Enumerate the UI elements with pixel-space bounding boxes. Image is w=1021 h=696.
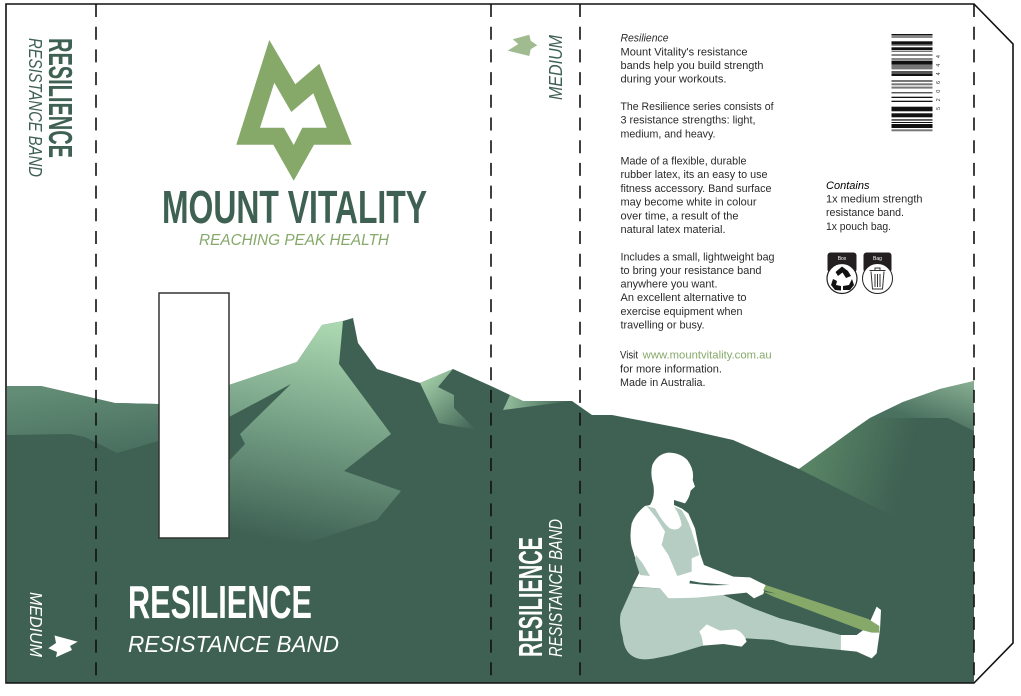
product description text: Made in Australia. <box>620 377 706 389</box>
left flap strength label <box>26 592 78 657</box>
medium text: MEDIUM <box>546 35 566 100</box>
product description text: www.mountvitality.com.au <box>642 350 772 362</box>
product description text: may become white in colour <box>620 196 757 208</box>
product description text: over time, a result of the <box>620 210 738 222</box>
logo: brand name: MOUNT VITALITY <box>162 181 427 233</box>
contents list: 1x medium strength <box>826 194 922 206</box>
product description text: exercise equipment when <box>620 306 742 318</box>
subtitle: resistance band: RESISTANCE BAND <box>128 631 339 657</box>
spine product name <box>513 519 566 657</box>
barcode bars <box>892 34 932 131</box>
product description text: rubber latex, its an easy to use <box>620 169 768 181</box>
left flap title: RESILIENCE <box>41 38 78 158</box>
product description text: fitness accessory. Band surface <box>620 183 772 195</box>
extended foot <box>841 607 881 658</box>
icon: bag to waste bin: Bag <box>873 256 882 262</box>
medium text: MEDIUM <box>26 592 46 657</box>
product description text: travelling or busy. <box>620 320 704 332</box>
product description text: Mount Vitality's resistance <box>620 46 748 58</box>
arm gap <box>689 581 730 585</box>
leggings <box>620 587 841 659</box>
tiny lit peak <box>503 395 572 410</box>
product description text: to bring your resistance band <box>620 265 762 277</box>
icon: green strength arrow <box>508 35 537 56</box>
contents list: 1x pouch bag. <box>826 221 891 233</box>
resistance band <box>763 585 879 633</box>
icon: box recyclable <box>827 252 857 294</box>
spine top strength label <box>508 35 566 100</box>
spine subtitle: RESISTANCE BAND <box>546 519 566 657</box>
central lit peak <box>229 321 401 543</box>
icon: bag to waste bin <box>862 252 892 294</box>
product description text: Includes a small, lightweight bag <box>620 251 774 263</box>
window cut-out <box>159 293 229 538</box>
product description text: Resilience <box>620 32 668 44</box>
contents list <box>826 180 922 233</box>
icon: box recyclable: Box <box>838 256 847 262</box>
product description text: Made of a flexible, durable <box>620 156 746 168</box>
sports top <box>635 506 699 576</box>
right hill upper <box>870 381 974 431</box>
left flap top label <box>25 38 78 177</box>
bent foot <box>699 624 747 647</box>
product description text: during your workouts. <box>620 73 726 85</box>
spine title: RESILIENCE <box>513 537 550 657</box>
small lit peak <box>420 369 476 430</box>
front panel product name <box>128 576 339 657</box>
title: resilience: RESILIENCE <box>128 576 312 628</box>
product description text: Visit <box>620 350 638 362</box>
contents list: Contains <box>826 180 870 192</box>
left hill <box>7 386 158 453</box>
product description text: The Resilience series consists of <box>620 101 774 113</box>
band gap <box>763 590 776 594</box>
barcode <box>892 34 942 131</box>
left flap subtitle: RESISTANCE BAND <box>25 38 45 177</box>
skin: head, torso and arms <box>630 453 766 598</box>
mountain landscape background <box>7 318 974 683</box>
product description text: anywhere you want. <box>620 279 718 291</box>
right hill lower <box>799 418 974 557</box>
contents list: resistance band. <box>826 207 904 219</box>
dark mountain silhouette <box>7 318 974 683</box>
logo: tagline: REACHING PEAK HEALTH <box>199 232 390 249</box>
product description text: bands help you build strength <box>620 60 764 72</box>
product description text: medium, and heavy. <box>620 128 716 140</box>
product description text: for more information. <box>620 364 722 376</box>
barcode digits: 5206444 <box>936 55 942 110</box>
icon: white strength arrow <box>48 636 78 657</box>
product description text: An excellent alternative to <box>620 292 746 304</box>
product description text: 3 resistance strengths: light, <box>620 115 756 127</box>
illustration: seated woman stretching with resistance band <box>620 453 881 659</box>
logo: mountain mark <box>236 40 352 181</box>
product description text: natural latex material. <box>620 224 726 236</box>
product description text <box>620 32 774 389</box>
